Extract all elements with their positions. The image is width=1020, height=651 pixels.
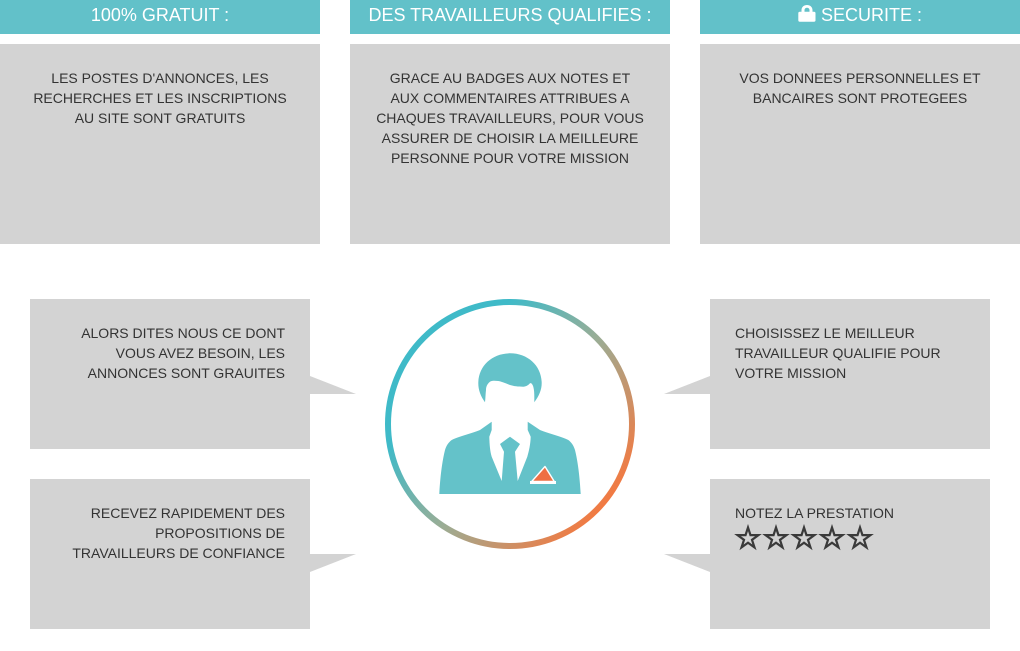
callout: step 1: ANNONCES SONT GRAUITES (88, 365, 285, 381)
callout: step 2: TRAVAILLEURS DE CONFIANCE (72, 545, 285, 561)
callout: step 2: PROPOSITIONS DE (155, 525, 285, 541)
header: 100% gratuit (0, 0, 320, 34)
gradient ring (388, 302, 632, 546)
panel: 100% gratuit text: RECHERCHES ET LES INSCRIPTIONS (33, 90, 287, 106)
callout: step 4 (710, 479, 990, 629)
callout: step 3: CHOISISSEZ LE MEILLEUR (735, 325, 915, 341)
panel: 100% gratuit text: LES POSTES D'ANNONCES, LES (51, 70, 269, 86)
panel: 100% gratuit text (0, 44, 320, 244)
callout: step 3: TRAVAILLEUR QUALIFIE POUR (735, 345, 941, 361)
callout: step 3: VOTRE MISSION (735, 365, 846, 381)
panel: travailleurs qualifies text: PERSONNE POUR VOTRE MISSION (391, 150, 629, 166)
person silhouette (439, 353, 581, 494)
header: 100% gratuit: 100% GRATUIT : (91, 5, 229, 25)
callout: step 1: VOUS AVEZ BESOIN, LES (116, 345, 285, 361)
header: securite (700, 0, 1020, 34)
panel: securite text: VOS DONNEES PERSONNELLES ET (739, 70, 981, 86)
central illustration: person in gradient ring (385, 299, 635, 549)
panel: travailleurs qualifies text: ASSURER DE CHOISIR LA MEILLEURE (382, 130, 638, 146)
icon: five star rating (734, 524, 874, 550)
callout: step 4: NOTEZ LA PRESTATION (735, 505, 894, 521)
callout: step 2: RECEVEZ RAPIDEMENT DES (91, 505, 285, 521)
callout: step 1 (30, 299, 310, 449)
header: des travailleurs qualifies: DES TRAVAILLEURS QUALIFIES : (368, 5, 652, 25)
callout pointers (310, 376, 710, 572)
pocket square (530, 466, 556, 484)
header: securite: SECURITE : (821, 5, 922, 25)
header: des travailleurs qualifies (350, 0, 670, 34)
callout: step 2 (30, 479, 310, 629)
panel: securite text (700, 44, 1020, 244)
callout: step 1: ALORS DITES NOUS CE DONT (81, 325, 285, 341)
icon: lock (798, 5, 816, 22)
panel: travailleurs qualifies text: AUX COMMENTAIRES ATTRIBUES A (390, 90, 630, 106)
panel: travailleurs qualifies text (350, 44, 670, 244)
callout: step 3 (710, 299, 990, 449)
panel: securite text: BANCAIRES SONT PROTEGEES (753, 90, 967, 106)
panel: travailleurs qualifies text: GRACE AU BADGES AUX NOTES ET (390, 70, 630, 86)
panel: 100% gratuit text: AU SITE SONT GRATUITS (75, 110, 245, 126)
panel: travailleurs qualifies text: CHAQUES TRAVAILLEURS, POUR VOUS (376, 110, 644, 126)
